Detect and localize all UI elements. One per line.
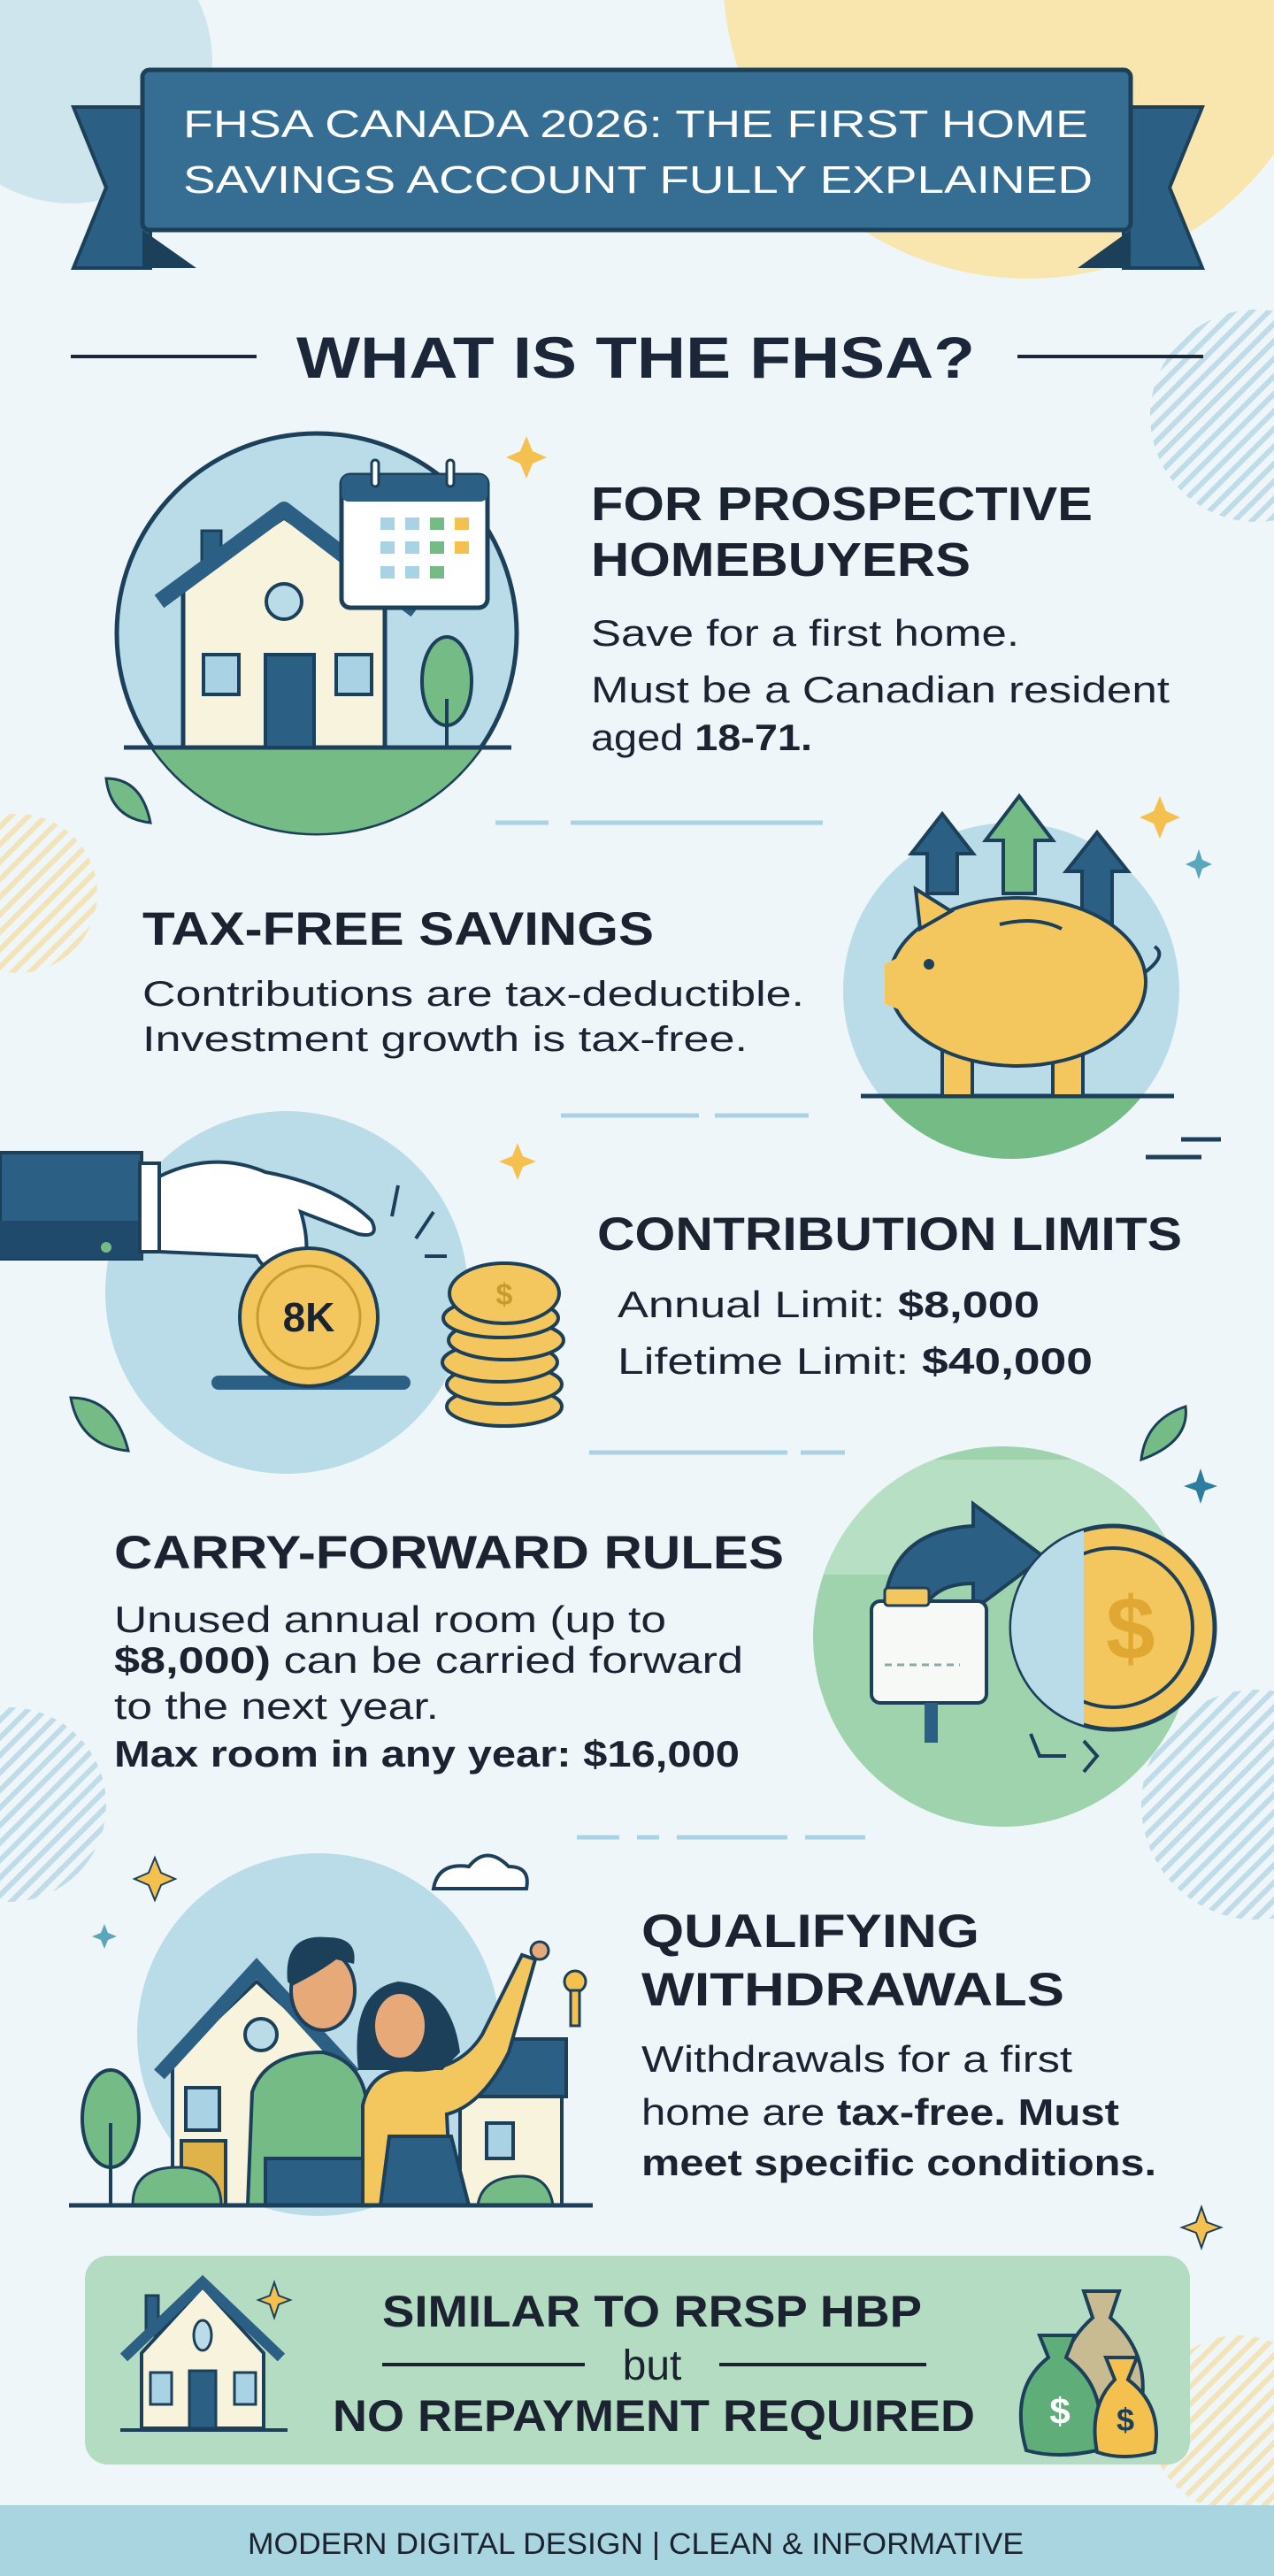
icon: sparkle xyxy=(506,436,547,479)
heading: what is the fhsa: WHAT IS THE FHSA? xyxy=(296,325,975,390)
callout: similar to rrsp hbp xyxy=(85,2256,1190,2465)
text block: prospective homebuyers: HOMEBUYERS xyxy=(591,533,971,586)
text block: qualifying withdrawals: Withdrawals for a first xyxy=(641,2038,1072,2080)
text block: qualifying withdrawals: WITHDRAWALS xyxy=(641,1964,1064,2016)
icon: house and calendar xyxy=(115,432,518,835)
text block: prospective homebuyers: Must be a Canadian resident xyxy=(591,669,1170,710)
icon: house xyxy=(120,2282,290,2430)
text block: prospective homebuyers: Save for a first home. xyxy=(591,612,1019,654)
icon: couple with house and key xyxy=(69,1853,593,2216)
icon: hand dropping 8K coin: $ xyxy=(496,1278,513,1312)
icon: piggy bank with arrows xyxy=(843,793,1179,1159)
text block: carry-forward rules: CARRY-FORWARD RULES xyxy=(114,1527,784,1579)
callout text xyxy=(333,2287,975,2441)
title text xyxy=(183,103,1093,202)
text block: carry-forward rules xyxy=(114,1527,784,1775)
text block: qualifying withdrawals: QUALIFYING xyxy=(641,1905,979,1958)
coin label: 8K xyxy=(283,1294,334,1340)
icon: sparkle xyxy=(1182,2207,1221,2248)
callout text: SIMILAR TO RRSP HBP xyxy=(382,2287,922,2336)
icon: hand dropping 8K coin xyxy=(0,1111,564,1474)
title text: SAVINGS ACCOUNT FULLY EXPLAINED xyxy=(183,158,1093,202)
icon: carry-forward arrow and coin: $ xyxy=(1106,1579,1155,1678)
title text: FHSA CANADA 2026: THE FIRST HOME xyxy=(183,103,1088,146)
icon: money bags xyxy=(1021,2291,1156,2457)
text block: prospective homebuyers: aged 18-71. xyxy=(591,717,812,758)
text block: tax-free savings: Investment growth is tax-free. xyxy=(142,1020,748,1059)
text block: tax-free savings xyxy=(142,903,804,1059)
footer: MODERN DIGITAL DESIGN | CLEAN & INFORMATIVE xyxy=(248,2527,1024,2561)
icon: leaf xyxy=(106,778,150,823)
text block: prospective homebuyers: FOR PROSPECTIVE xyxy=(591,478,1093,531)
text block: prospective homebuyers xyxy=(591,478,1170,758)
text block: qualifying withdrawals xyxy=(641,1905,1156,2183)
text block: contribution limits: Lifetime Limit: $40,000 xyxy=(618,1340,1093,1382)
icon: leaves xyxy=(71,1398,1186,1460)
callout: similar to rrsp hbp: $ xyxy=(1117,2402,1134,2438)
text block: carry-forward rules: to the next year. xyxy=(114,1685,439,1727)
callout: similar to rrsp hbp: $ xyxy=(1049,2390,1071,2432)
text block: contribution limits: CONTRIBUTION LIMITS xyxy=(597,1208,1182,1261)
callout text: but xyxy=(623,2342,681,2389)
text block: contribution limits xyxy=(597,1208,1182,1382)
text block: carry-forward rules: Max room in any year: $16,000 xyxy=(114,1733,740,1775)
text block: tax-free savings: Contributions are tax-deductible. xyxy=(142,975,804,1014)
icon: sparkles xyxy=(1140,796,1212,879)
text block: carry-forward rules: Unused annual room (up to xyxy=(114,1598,666,1640)
icon: carry-forward arrow and coin xyxy=(796,1446,1221,1827)
footer xyxy=(0,2505,1274,2576)
text block: qualifying withdrawals: home are tax-free. Must xyxy=(641,2091,1119,2133)
callout text: NO REPAYMENT REQUIRED xyxy=(333,2391,975,2441)
text block: carry-forward rules: $8,000) can be carried forward xyxy=(114,1639,743,1681)
text block: qualifying withdrawals: meet specific conditions. xyxy=(641,2142,1156,2183)
title ribbon xyxy=(73,70,1202,268)
text block: tax-free savings: TAX-FREE SAVINGS xyxy=(142,903,654,955)
text block: contribution limits: Annual Limit: $8,000 xyxy=(618,1284,1040,1325)
